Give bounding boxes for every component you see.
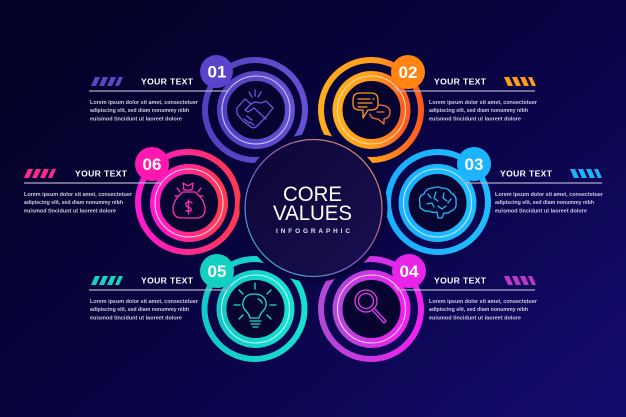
paragraph: Lorem ipsum dolor sit amet, consectetuer	[429, 299, 538, 305]
paragraph	[429, 299, 538, 322]
paragraph: euismod tincidunt ut laoreet dolore	[24, 208, 116, 214]
paragraph	[24, 192, 133, 214]
paragraph: euismod tincidunt ut laoreet dolore	[429, 316, 521, 322]
icon: magnifying glass	[355, 290, 386, 323]
stripes	[91, 77, 123, 86]
paragraph: euismod tincidunt ut laoreet dolore	[429, 116, 521, 122]
block: step 05 text	[89, 276, 231, 322]
badge 05: 05	[208, 262, 226, 281]
label: YOUR TEXT	[75, 168, 128, 178]
heading: core: CORE	[283, 183, 342, 206]
block: step 02 text	[394, 76, 538, 122]
badge 03: 03	[465, 155, 483, 174]
block: step 04 text	[394, 276, 538, 322]
paragraph: adipiscing elit, sed diam nonummy nibh	[495, 200, 594, 206]
paragraph: adipiscing elit, sed diam nonummy nibh	[429, 307, 528, 313]
paragraph: Lorem ipsum dolor sit amet, consectetuer	[495, 192, 604, 198]
paragraph: euismod tincidunt ut laoreet dolore	[90, 316, 182, 322]
paragraph: Lorem ipsum dolor sit amet, consectetuer	[90, 299, 199, 305]
icon: handshake	[237, 90, 273, 128]
badge 02	[391, 55, 425, 89]
stripes	[570, 169, 602, 178]
label: YOUR TEXT	[434, 76, 487, 86]
paragraph	[90, 100, 199, 122]
block: step 06 text	[24, 168, 165, 214]
paragraph: euismod tincidunt ut laoreet dolore	[495, 208, 587, 214]
subtitle: INFOGRAPHIC	[276, 228, 350, 235]
paragraph	[429, 100, 538, 122]
paragraph	[495, 192, 604, 214]
label: YOUR TEXT	[500, 168, 553, 178]
icon: brain	[420, 187, 456, 218]
paragraph: Lorem ipsum dolor sit amet, consectetuer	[90, 100, 199, 106]
badge 01: 01	[208, 62, 226, 82]
paragraph: Lorem ipsum dolor sit amet, consectetuer	[429, 100, 538, 106]
badge 04: 04	[400, 262, 419, 281]
stripes	[91, 276, 123, 285]
paragraph: adipiscing elit, sed diam nonummy nibh	[429, 108, 528, 114]
panel: step 01 rings	[205, 60, 305, 160]
badge 06	[135, 147, 169, 181]
badge 03	[457, 147, 491, 181]
paragraph: adipiscing elit, sed diam nonummy nibh	[24, 200, 123, 206]
label: YOUR TEXT	[141, 76, 194, 86]
block: step 03 text	[461, 168, 604, 214]
paragraph: Lorem ipsum dolor sit amet, consectetuer	[24, 192, 133, 198]
block: step 01 text	[89, 76, 231, 122]
panel: step 05 rings	[204, 259, 304, 359]
label: YOUR TEXT	[434, 276, 487, 286]
panel: step 06 rings	[138, 152, 238, 252]
heading: values: VALUES	[273, 202, 352, 225]
stripes	[504, 276, 536, 285]
badge 04	[392, 254, 426, 288]
stripes	[24, 169, 56, 178]
panel: step 03 rings	[388, 152, 488, 252]
stripes	[504, 77, 536, 86]
paragraph: euismod tincidunt ut laoreet dolore	[90, 116, 182, 122]
badge 05	[200, 254, 234, 288]
icon: light bulb	[234, 283, 276, 327]
badge 02: 02	[399, 63, 417, 82]
paragraph	[90, 299, 199, 322]
panel: step 04 rings	[321, 259, 421, 359]
badge 01	[200, 55, 233, 88]
paragraph: adipiscing elit, sed diam nonummy nibh	[90, 108, 189, 114]
icon: chat bubbles	[353, 93, 390, 124]
paragraph: adipiscing elit, sed diam nonummy nibh	[90, 307, 189, 313]
label: YOUR TEXT	[141, 276, 194, 286]
badge 06: 06	[143, 155, 161, 174]
panel: step 02 rings	[321, 60, 421, 160]
icon: money bag	[173, 183, 205, 218]
panel: central circle	[240, 134, 388, 282]
